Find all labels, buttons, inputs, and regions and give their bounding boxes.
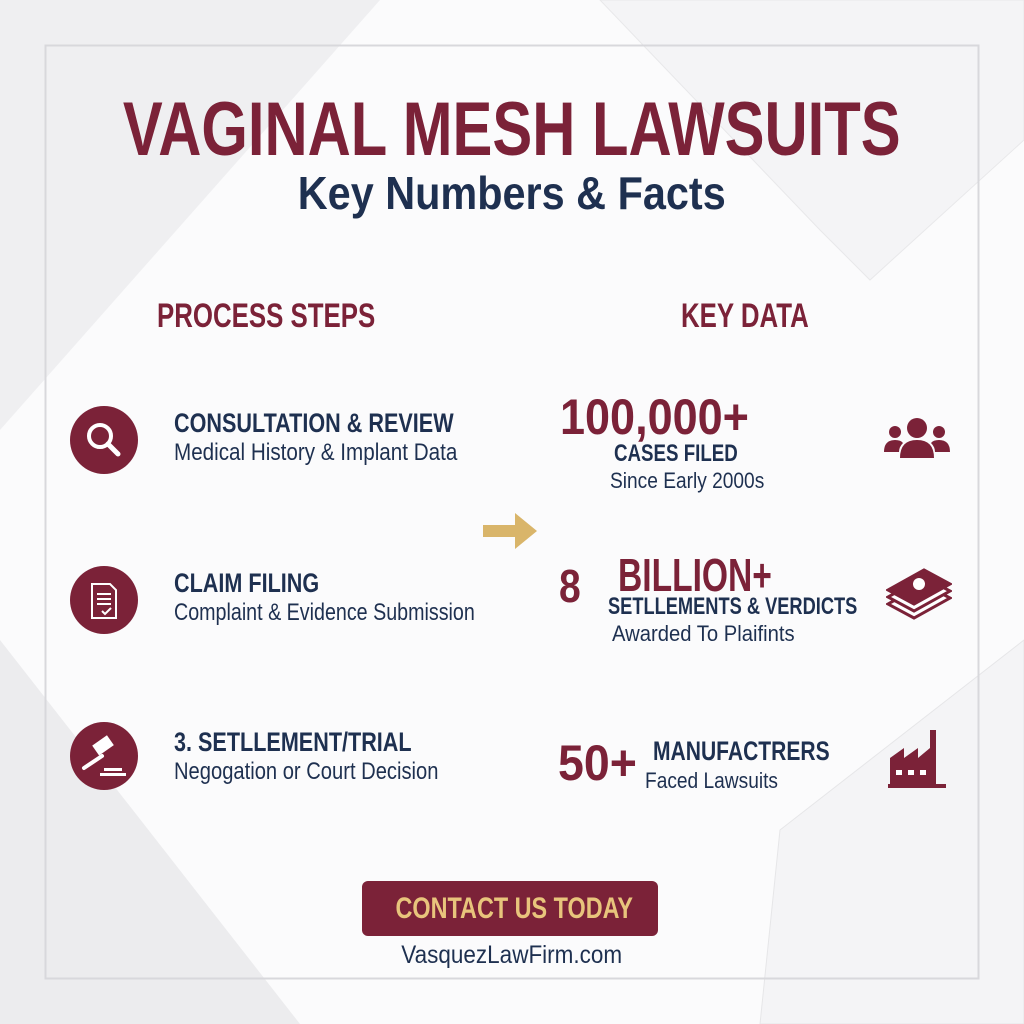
arrow — [483, 513, 537, 549]
step 1 text — [174, 408, 458, 466]
icon: document — [70, 566, 138, 634]
data 2: Awarded To Plaifints — [612, 621, 795, 646]
button: contact: CONTACT US TODAY — [395, 892, 633, 925]
step 1 text: CONSULTATION & REVIEW — [174, 408, 454, 438]
step 3 text: Negogation or Court Decision — [174, 758, 438, 785]
heading: process steps: PROCESS STEPS — [157, 297, 375, 335]
subtitle: Key Numbers & Facts — [298, 167, 726, 219]
data 1: CASES FILED — [614, 440, 738, 467]
step 3 text: 3. SETLLEMENT/TRIAL — [174, 727, 412, 757]
step 1 text: Medical History & Implant Data — [174, 439, 457, 466]
url: VasquezLawFirm.com — [402, 941, 622, 969]
step 1 — [70, 406, 458, 474]
step 3 — [70, 722, 438, 790]
icon: money — [886, 568, 952, 620]
step 2 text: CLAIM FILING — [174, 568, 319, 598]
heading: key data: KEY DATA — [681, 297, 809, 335]
step 2 text — [174, 568, 475, 626]
data 2 — [559, 549, 952, 646]
data 2: 8 — [559, 560, 581, 612]
data 1 — [560, 389, 950, 493]
button: contact — [362, 881, 658, 936]
data 2: SETLLEMENTS & VERDICTS — [608, 593, 857, 620]
data 1: Since Early 2000s — [610, 468, 764, 493]
data 3 — [558, 730, 946, 793]
data 3: 50+ — [558, 735, 637, 791]
icon: people — [884, 418, 950, 458]
icon: gavel — [70, 722, 138, 790]
title: VAGINAL MESH LAWSUITS — [123, 87, 901, 172]
icon: magnifier — [70, 406, 138, 474]
data 2: BILLION+ — [618, 549, 772, 601]
step 3 text — [174, 727, 438, 785]
data 3: MANUFACTRERS — [653, 736, 830, 766]
data 1: 100,000+ — [560, 389, 749, 445]
icon: factory — [888, 730, 946, 788]
step 2 — [70, 566, 475, 634]
data 3: Faced Lawsuits — [645, 768, 778, 793]
step 2 text: Complaint & Evidence Submission — [174, 599, 475, 626]
